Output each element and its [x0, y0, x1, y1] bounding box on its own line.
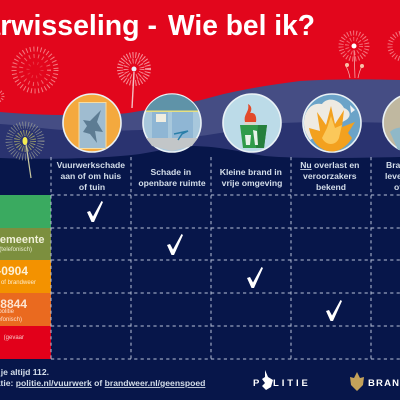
column heading: overlast: Nu overlast en: [300, 160, 359, 170]
logo: brandweer: [350, 372, 400, 391]
legend row: green: [0, 195, 51, 228]
firework: yellow burst: [9, 125, 41, 178]
column heading: overlast: veroorzakers: [303, 171, 357, 181]
firework: burst at left edge: [0, 91, 3, 101]
firework: right burst with small sparks: [341, 33, 367, 78]
legend row: brandweer: of brandweer: [1, 280, 36, 286]
logo: politie: LITIE: [273, 378, 311, 389]
icon: public space damage: [143, 94, 201, 152]
background: navy table area: [0, 146, 400, 400]
logo: politie: P: [253, 378, 260, 389]
column heading: openbare ruimte: Schade in: [151, 167, 191, 177]
legend row: 112: (gevaar: [4, 335, 24, 341]
legend row: 112: [0, 326, 51, 359]
table grid: [51, 157, 400, 359]
legend row: brandweer: [0, 260, 51, 293]
column heading: openbare ruimte: openbare ruimte: [138, 178, 206, 188]
legend row: gemeente: [0, 228, 51, 260]
check mark: row 2: [167, 234, 183, 255]
background: red sky: [0, 0, 400, 130]
check mark: row 1: [87, 201, 103, 222]
icon: broken window: [63, 94, 121, 152]
column heading: kleine brand: vrije omgeving: [222, 178, 282, 188]
check mark: row 4: [326, 300, 342, 321]
title: [0, 10, 315, 42]
column heading: kleine brand: Kleine brand in: [220, 167, 282, 177]
background: middle wave: [0, 122, 400, 200]
background: light wave: [0, 79, 400, 200]
legend row: gemeente: (telefonisch): [0, 247, 32, 253]
column heading: vuurwerkschade: of tuin: [79, 182, 105, 192]
check mark: row 3: [247, 267, 263, 288]
firework: burst at right edge: [390, 33, 400, 59]
colour legend column: [0, 195, 51, 359]
firework: large red burst: [14, 49, 56, 91]
title: Wie bel ik?: [168, 10, 315, 42]
column heading: vuurwerkschade: aan of om huis: [60, 171, 121, 181]
legend row: politie: [0, 293, 51, 326]
firework: white burst with stem: [120, 55, 148, 108]
icon: fifth scene: [383, 94, 400, 152]
icon: fire explosion: [303, 94, 361, 152]
icon: burning bin: [223, 94, 281, 152]
column heading: overlast: bekend: [316, 182, 346, 192]
logo: politie: [253, 370, 311, 390]
column heading: vuurwerkschade: Vuurwerkschade: [57, 160, 125, 170]
